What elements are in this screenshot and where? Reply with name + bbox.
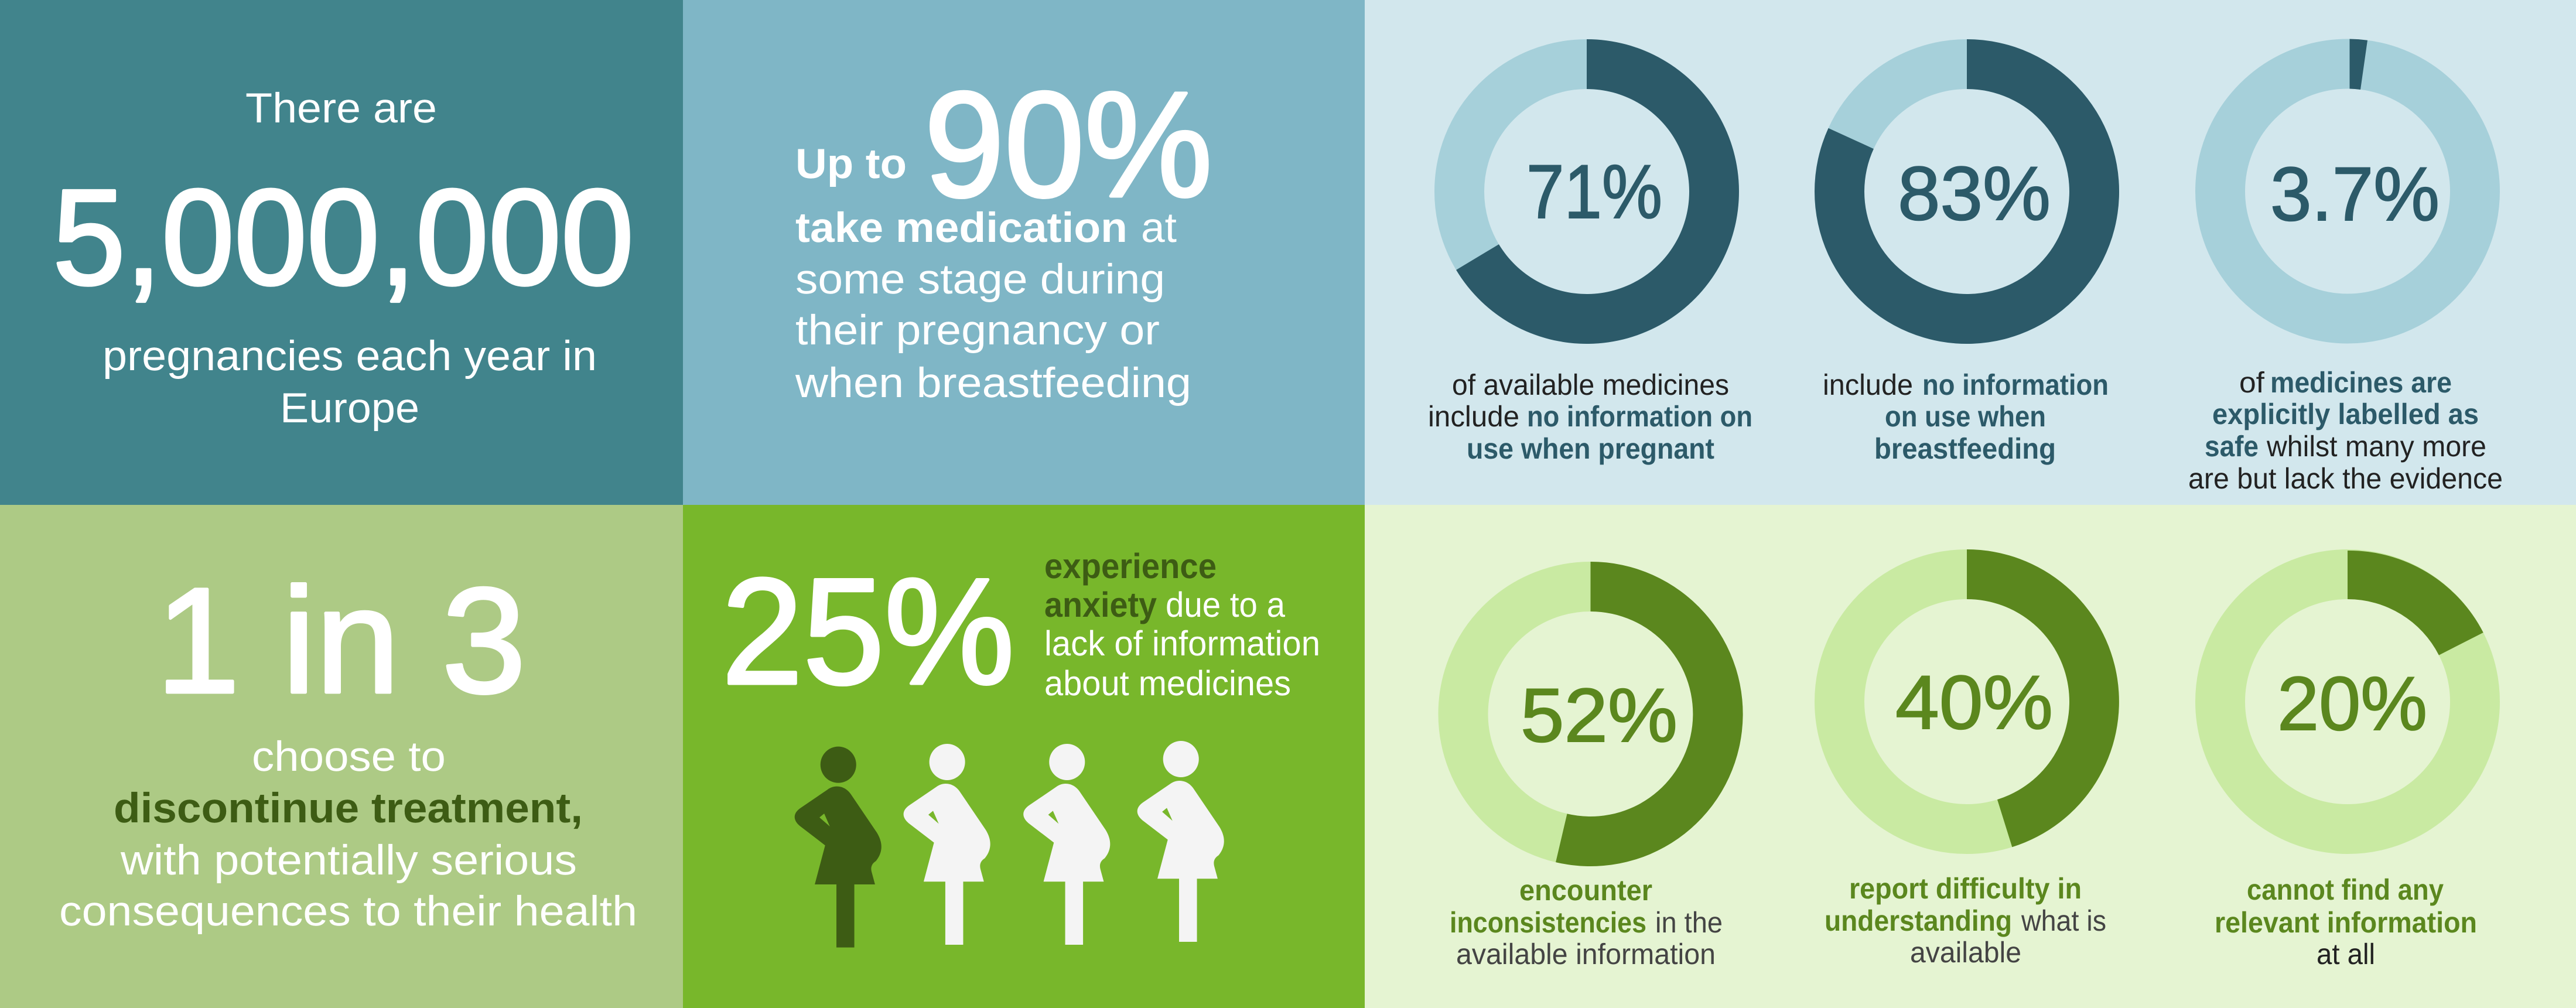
caption: 40%: what is [2021, 904, 2106, 937]
caption: 71%: of available medicines [1452, 368, 1729, 401]
donut chart: 52%: 52% [1521, 672, 1678, 758]
caption: 52% [1450, 874, 1723, 971]
caption: 83% [1823, 368, 2109, 465]
donut chart: 3.7% [2220, 39, 2475, 319]
caption: 52%: in the [1655, 906, 1723, 939]
caption: 3.7%: are but lack the evidence [2188, 462, 2503, 495]
caption: 3.7%: medicines are [2270, 366, 2452, 399]
big number: 5,000,000: 5,000,000 [53, 162, 634, 313]
panel: lack of information donuts [1365, 0, 2576, 505]
text: take medication at some stage during their pregnancy or when breastfeeding: at [1141, 204, 1177, 251]
icon: pregnant figure, dark [795, 747, 882, 948]
caption: 52%: inconsistencies [1450, 906, 1646, 939]
caption: 20%: relevant information [2215, 906, 2477, 939]
panel: up to 90% take medication [683, 0, 1365, 505]
panel: 25% experience anxiety [683, 505, 1365, 1008]
text: take medication at some stage during their pregnancy or when breastfeeding: some stage during [795, 256, 1165, 303]
text: experience anxiety due to a lack of information about medicines: due to a [1166, 585, 1286, 624]
donut chart: 3.7%: 3.7% [2270, 151, 2440, 237]
caption: 3.7% [2188, 366, 2503, 495]
panel: 5,000,000 pregnancies [0, 0, 683, 505]
panel: difficulties finding information donuts [1365, 505, 2576, 1008]
caption: 83%: no information [1922, 368, 2109, 401]
caption: 71%: no information on [1527, 400, 1752, 433]
text: pregnancies each year in Europe: pregnancies each year in [103, 333, 597, 380]
donut chart: 40% [1839, 549, 2119, 847]
text: experience anxiety due to a lack of information about medicines: anxiety [1044, 585, 1157, 624]
text: experience anxiety due to a lack of information about medicines: about medicines [1044, 664, 1291, 703]
caption: 3.7%: safe [2205, 430, 2259, 463]
text: pregnancies each year in Europe: Europe [280, 385, 419, 432]
caption: 40%: available [1910, 936, 2021, 969]
donut chart: 20% [2220, 551, 2483, 829]
icon: pregnant figure, white 2 [1023, 744, 1110, 945]
caption: 40% [1825, 872, 2106, 969]
text: Up to: Up to [795, 141, 907, 187]
text: choose to discontinue treatment: discontinue treatment, [114, 785, 583, 832]
text: choose to discontinue treatment: with potentially serious [120, 837, 577, 884]
big number: 25%: 25% [722, 546, 1014, 716]
panel: 1 in 3 discontinue treatment [0, 505, 683, 1008]
text: experience anxiety due to a lack of information about medicines [1044, 546, 1320, 703]
text: pregnancies each year in Europe [103, 333, 597, 432]
icon: pregnant figure, white 1 [904, 744, 990, 945]
icon: pregnant figure, white 3 [1137, 741, 1224, 942]
donut chart: 83%: 83% [1898, 151, 2051, 236]
caption: 3.7%: whilst many more [2266, 430, 2486, 463]
text: There are: There are [245, 85, 437, 132]
caption: 3.7%: explicitly labelled as [2212, 398, 2479, 430]
text: take medication at some stage during their pregnancy or when breastfeeding: their pregnancy or [795, 307, 1160, 354]
donut chart: 71% [1456, 39, 1739, 344]
caption: 71%: use when pregnant [1467, 432, 1714, 465]
caption: 71% [1428, 368, 1752, 465]
text: take medication at some stage during their pregnancy or when breastfeeding: take medication [795, 204, 1128, 251]
caption: 52%: encounter [1519, 874, 1652, 907]
donut chart: 52% [1463, 562, 1743, 866]
big number: 1 in 3: 1 in 3 [156, 557, 526, 725]
text: choose to discontinue treatment: choose to [252, 733, 446, 780]
donut chart: 20%: 20% [2277, 661, 2427, 746]
text: choose to discontinue treatment [59, 733, 637, 935]
text: take medication at some stage during their pregnancy or when breastfeeding [795, 204, 1191, 406]
caption: 20%: cannot find any [2247, 873, 2444, 906]
caption: 20%: at all [2317, 938, 2375, 971]
text: experience anxiety due to a lack of information about medicines: experience [1044, 546, 1217, 586]
caption: 83%: include [1823, 368, 1913, 401]
caption: 83%: on use when [1885, 400, 2046, 433]
caption: 3.7%: of [2239, 366, 2264, 399]
caption: 40%: understanding [1825, 904, 2012, 937]
donut chart: 71%: 71% [1526, 149, 1662, 234]
donut chart: 40%: 40% [1895, 660, 2053, 745]
text: take medication at some stage during their pregnancy or when breastfeeding: when breastfeeding [795, 360, 1191, 406]
donut chart: 83% [1815, 39, 2119, 344]
text: experience anxiety due to a lack of information about medicines: lack of information [1044, 624, 1320, 663]
caption: 83%: breastfeeding [1874, 432, 2056, 465]
caption: 52%: available information [1456, 938, 1716, 971]
caption: 40%: report difficulty in [1849, 872, 2082, 905]
caption: 20% [2215, 873, 2477, 971]
caption: 71%: include [1428, 400, 1519, 433]
text: choose to discontinue treatment: consequences to their health [59, 888, 637, 935]
big number: 90%: 90% [924, 61, 1212, 228]
